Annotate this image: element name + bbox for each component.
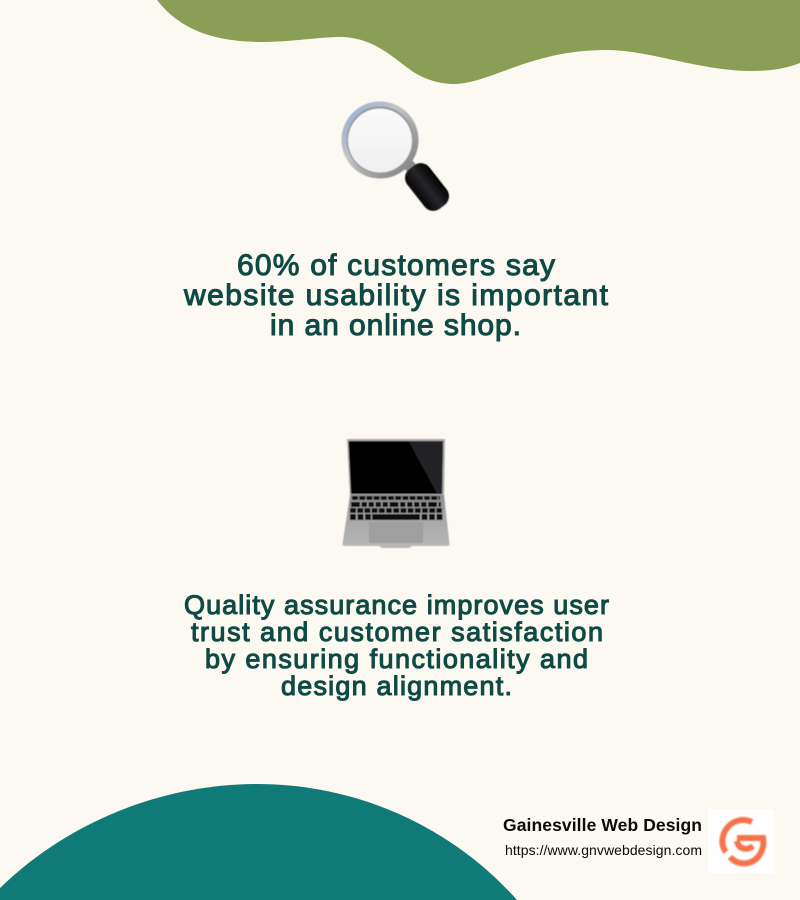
heading: usability statistic: in an online shop. — [270, 309, 521, 342]
logo: orange G mark — [722, 820, 763, 863]
heading: usability statistic: website usability is important — [183, 279, 609, 312]
heading: quality assurance: trust and customer satisfaction — [191, 617, 603, 647]
logo tile — [708, 809, 774, 873]
icon: laptop — [342, 439, 450, 548]
top green wave — [157, 0, 800, 84]
heading: usability statistic — [183, 249, 609, 342]
keyboard — [350, 498, 443, 517]
magnifier handle — [401, 159, 453, 215]
laptop screen — [348, 441, 443, 494]
magnifier inner rim — [346, 106, 414, 174]
heading: quality assurance: Quality assurance improves user — [184, 590, 609, 620]
heading: usability statistic: 60% of customers say — [237, 249, 555, 282]
magnifier collar — [404, 160, 421, 178]
bottom teal arc — [0, 784, 517, 900]
magnifier ring — [342, 102, 418, 178]
heading: quality assurance: design alignment. — [281, 671, 512, 701]
icon: magnifying glass — [342, 102, 453, 215]
laptop base — [342, 495, 450, 548]
footer brand — [503, 815, 702, 858]
laptop lid — [347, 439, 445, 496]
screen reflection — [409, 441, 443, 494]
brand name: Gainesville Web Design — [503, 815, 702, 835]
heading: quality assurance — [184, 590, 609, 701]
heading: quality assurance: by ensuring functionality and — [205, 644, 588, 674]
brand url: https://www.gnvwebdesign.com — [505, 842, 702, 858]
trackpad — [369, 522, 423, 543]
magnifier lens — [348, 108, 412, 172]
